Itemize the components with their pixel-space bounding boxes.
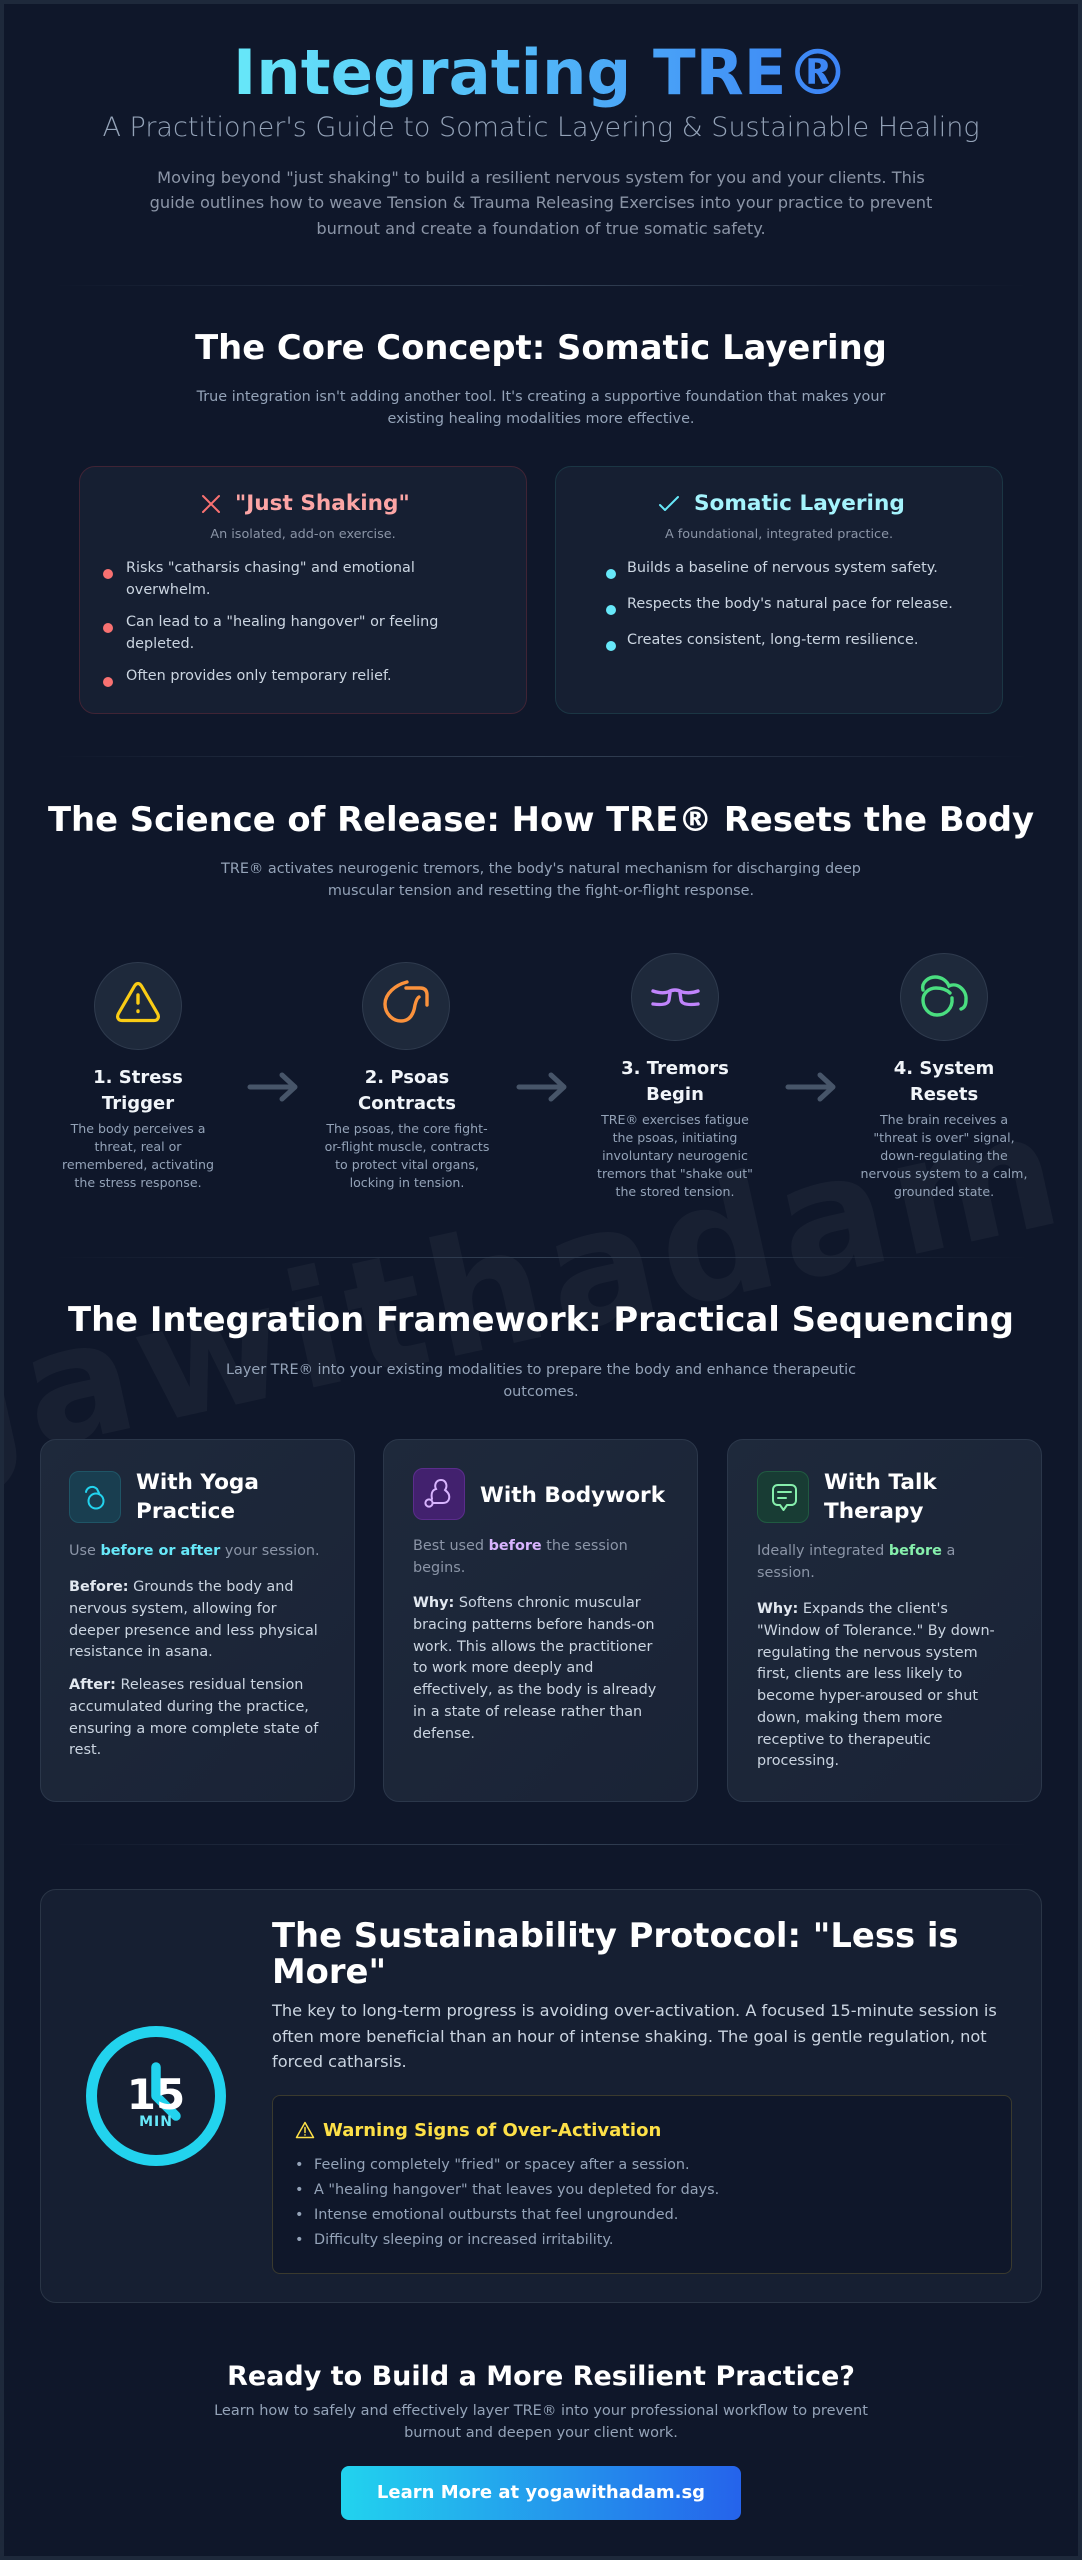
step description: "threat is over" signal, (873, 1130, 1015, 1145)
step description (861, 1112, 1027, 1199)
step description: threat, real or (94, 1139, 181, 1154)
step title (621, 1058, 729, 1105)
card subtitle: An isolated, add-on exercise. (210, 527, 396, 542)
section intro: science of release (220, 861, 861, 899)
intro text (150, 168, 932, 238)
step description: The body perceives a (71, 1121, 205, 1136)
cta button (341, 2466, 741, 2520)
bullet list: depleted. (126, 636, 194, 652)
step 1: stress trigger (62, 962, 214, 1190)
panel: with talk therapy (727, 1439, 1042, 1802)
step description: the psoas, initiating (613, 1130, 737, 1145)
cta text: Learn how to safely and effectively layer TRE® into your professional workflow to prevent (214, 2403, 868, 2419)
panel heading: More" (272, 1952, 386, 1991)
bullet list: Risks "catharsis chasing" and emotional (126, 560, 415, 576)
step title (93, 1067, 183, 1114)
why text: processing. (757, 1753, 839, 1769)
step description: involuntary neurogenic (602, 1148, 748, 1163)
before text: deeper presence and less physical (69, 1623, 318, 1639)
after text: accumulated during the practice, (69, 1699, 309, 1715)
why text: become hyper-aroused or shut (757, 1688, 978, 1704)
warning list: Feeling completely "fried" or spacey after a session. (314, 2157, 690, 2173)
usage note: Ideally integrated before a (757, 1543, 955, 1559)
warning list: Difficulty sleeping or increased irritability. (314, 2232, 613, 2248)
step title: Trigger (102, 1093, 174, 1114)
section intro: science of release: muscular tension and resetting the fight-or-flight response. (328, 883, 754, 899)
icon: warning (296, 2122, 314, 2138)
card heading: With Talk (824, 1470, 937, 1495)
after text: ensuring a more complete state of (69, 1721, 318, 1737)
warning list: • (295, 2182, 304, 2198)
cta text (0, 2401, 1082, 2444)
step description: nervous system to a calm, (861, 1166, 1027, 1181)
why text: receptive to therapeutic (757, 1732, 931, 1748)
bullet list (103, 560, 438, 687)
step title: Resets (910, 1084, 978, 1105)
step 4: system resets (861, 953, 1027, 1199)
arrow (516, 1072, 566, 1102)
step 2: psoas contracts (325, 962, 489, 1190)
why text: effectively, as the body is already (413, 1682, 656, 1698)
icon: psoas (362, 962, 450, 1050)
step description: down-regulating the (880, 1148, 1008, 1163)
warning list: A "healing hangover" that leaves you depleted for days. (314, 2182, 719, 2198)
panel paragraph: The key to long-term progress is avoiding over-activation. A focused 15-minute session is (272, 2001, 997, 2020)
card heading: With Bodywork (480, 1483, 665, 1508)
warning list: Intense emotional outbursts that feel ungrounded. (314, 2207, 678, 2223)
card heading: Somatic Layering (694, 491, 905, 516)
before text: resistance in asana. (69, 1644, 213, 1660)
section heading: integration framework: The Integration Framework: Practical Sequencing (68, 1300, 1014, 1339)
section heading: science of release: The Science of Release: How TRE® Resets the Body (48, 800, 1034, 839)
step description: or-flight muscle, contracts (325, 1139, 489, 1154)
icon: bodywork (413, 1468, 465, 1520)
panel paragraph: forced catharsis. (272, 2052, 407, 2071)
why text: Why: Softens chronic muscular (413, 1595, 641, 1611)
bullet list: Often provides only temporary relief. (126, 668, 392, 684)
panel: sustainability protocol (40, 1889, 1042, 2303)
step description: the stored tension. (616, 1184, 734, 1199)
card heading (136, 1470, 259, 1524)
icon: yoga (69, 1471, 121, 1523)
section intro: integration framework: outcomes. (503, 1384, 579, 1400)
step title: 3. Tremors (621, 1058, 729, 1079)
card subtitle: A foundational, integrated practice. (665, 527, 893, 542)
step description: grounded state. (894, 1184, 994, 1199)
icon: reset (900, 953, 988, 1041)
step description (62, 1121, 214, 1190)
usage note: Best used before the session (413, 1538, 628, 1554)
icon: warning triangle (94, 962, 182, 1050)
step title: 2. Psoas (365, 1067, 449, 1088)
title: Integrating TRE® (233, 36, 849, 109)
step title: Contracts (358, 1093, 456, 1114)
why text: down, making them more (757, 1710, 942, 1726)
callout: warning signs (272, 2095, 1012, 2274)
step description (597, 1112, 753, 1199)
why text: to work more deeply and (413, 1660, 593, 1676)
step 3: tremors begin (597, 953, 753, 1199)
section intro: core concept: True integration isn't adding another tool. It's creating a supportive foundation that makes your (197, 389, 885, 405)
section intro: core concept: existing healing modalities more effective. (387, 411, 694, 427)
after text: rest. (69, 1742, 101, 1758)
icon: tremors (631, 953, 719, 1041)
section intro: science of release: TRE® activates neurogenic tremors, the body's natural mechanism for discharging deep (221, 861, 861, 877)
step description: The brain receives a (880, 1112, 1008, 1127)
why text: defense. (413, 1726, 475, 1742)
step description (325, 1121, 489, 1190)
warning list: • (295, 2232, 304, 2248)
panel: with yoga practice (40, 1439, 355, 1802)
section intro: core concept (196, 389, 886, 427)
usage note (413, 1538, 628, 1576)
header (102, 36, 980, 238)
step title (894, 1058, 994, 1105)
step title: 1. Stress (93, 1067, 183, 1088)
why text (413, 1595, 656, 1742)
bullet list (606, 560, 953, 651)
intro text: burnout and create a foundation of true somatic safety. (316, 219, 766, 238)
why text: work. This allows the practitioner (413, 1639, 652, 1655)
step description: remembered, activating (62, 1157, 214, 1172)
bullet list: Creates consistent, long-term resilience. (627, 632, 918, 648)
step title: Begin (646, 1084, 704, 1105)
panel: with bodywork (383, 1439, 698, 1802)
section intro: integration framework: Layer TRE® into your existing modalities to prepare the body and enhance therapeutic (226, 1362, 856, 1378)
step description: locking in tension. (350, 1175, 464, 1190)
clock unit: MIN (139, 2114, 173, 2130)
panel paragraph: often more beneficial than an hour of intense shaking. The goal is gentle regulation, not (272, 2027, 987, 2046)
step description: TRE® exercises fatigue (601, 1112, 749, 1127)
usage note: session. (757, 1565, 815, 1581)
panel: somatic layering (555, 466, 1003, 714)
arrow (248, 1072, 298, 1102)
why text: regulating the nervous system (757, 1645, 978, 1661)
section intro: integration framework (226, 1362, 856, 1400)
card heading: Practice (136, 1499, 235, 1524)
why text: bracing patterns before hands-on (413, 1617, 655, 1633)
cta button: Learn More at yogawithadam.sg (377, 2482, 705, 2503)
before text: nervous system, allowing for (69, 1601, 277, 1617)
usage note: begins. (413, 1560, 465, 1576)
icon: speech bubble (757, 1471, 809, 1523)
panel paragraph (272, 2001, 997, 2071)
icon: check (659, 496, 679, 511)
why text: first, clients are less likely to (757, 1666, 962, 1682)
bullet list: Respects the body's natural pace for release. (627, 596, 953, 612)
panel heading: The Sustainability Protocol: "Less is (272, 1916, 959, 1955)
why text: in a state of release rather than (413, 1704, 642, 1720)
why text: "Window of Tolerance." By down- (757, 1623, 995, 1639)
step description: tremors that "shake out" (597, 1166, 753, 1181)
warning list: • (295, 2157, 304, 2173)
step title (358, 1067, 456, 1114)
subtitle: A Practitioner's Guide to Somatic Layering & Sustainable Healing (102, 112, 980, 143)
card heading (824, 1470, 938, 1524)
call to action (214, 2361, 868, 2520)
before text (69, 1579, 318, 1660)
step description: The psoas, the core fight- (326, 1121, 488, 1136)
why text: Why: Expands the client's (757, 1601, 948, 1617)
intro text: guide outlines how to weave Tension & Trauma Releasing Exercises into your practice to prevent (150, 193, 932, 212)
warning list: • (295, 2207, 304, 2223)
before text: Before: Grounds the body and (69, 1579, 294, 1595)
bullet list: Can lead to a "healing hangover" or feeling (126, 614, 438, 630)
card heading: "Just Shaking" (235, 491, 410, 516)
bullet list: overwhelm. (126, 582, 210, 598)
usage note (757, 1543, 955, 1581)
icon: cross (202, 495, 220, 513)
step description: the stress response. (74, 1175, 202, 1190)
panel: just shaking (79, 466, 527, 714)
warning list (295, 2157, 719, 2248)
after text: After: Releases residual tension (69, 1677, 303, 1693)
step title: 4. System (894, 1058, 994, 1079)
cta heading: Ready to Build a More Resilient Practice? (227, 2361, 855, 2392)
card heading: Therapy (824, 1499, 924, 1524)
clock number: 15 (127, 2070, 185, 2119)
step description: to protect vital organs, (335, 1157, 479, 1172)
arrow (786, 1072, 836, 1102)
panel heading (272, 1916, 959, 1991)
card heading: With Yoga (136, 1470, 259, 1495)
usage note: Use before or after your session. (69, 1543, 320, 1559)
bullet list: Builds a baseline of nervous system safety. (627, 560, 938, 576)
section heading: core concept: The Core Concept: Somatic Layering (195, 328, 887, 367)
after text (69, 1677, 319, 1758)
cta text: burnout and deepen your client work. (404, 2425, 678, 2441)
callout heading: Warning Signs of Over-Activation (323, 2120, 661, 2141)
icon: 15 minute clock (86, 2026, 226, 2166)
intro text: Moving beyond "just shaking" to build a resilient nervous system for you and your clients. This (157, 168, 925, 187)
why text (757, 1601, 995, 1769)
